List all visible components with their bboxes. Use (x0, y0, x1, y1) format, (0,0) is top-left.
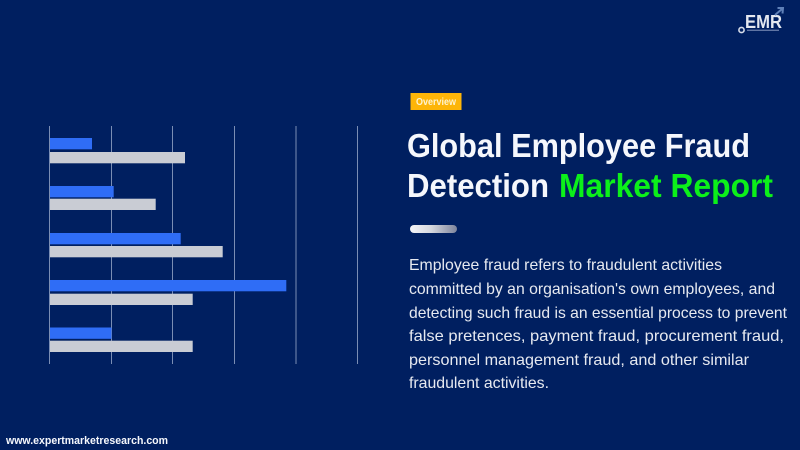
EMR logo (739, 8, 783, 33)
title (407, 127, 773, 204)
overview tag: Overview (416, 97, 456, 108)
overview tag (410, 93, 462, 110)
title: Market Report (559, 167, 773, 204)
description paragraph: personnel management fraud, and other similar (409, 352, 750, 369)
description paragraph: Employee fraud refers to fraudulent activities (409, 257, 722, 274)
EMR logo: EMR (745, 12, 782, 32)
description paragraph: detecting such fraud is an essential process to prevent (409, 305, 788, 322)
bar chart (50, 126, 358, 364)
description paragraph: false pretences, payment fraud, procurement fraud, (409, 328, 784, 345)
description paragraph (409, 257, 788, 392)
title: Global Employee Fraud (407, 127, 750, 164)
title: Detection (407, 167, 549, 204)
description paragraph: committed by an organisation's own employees, and (409, 281, 775, 298)
gradient pill divider (410, 225, 457, 233)
description paragraph: fraudulent activities. (409, 375, 549, 392)
website footer: www.expertmarketresearch.com (5, 435, 168, 447)
